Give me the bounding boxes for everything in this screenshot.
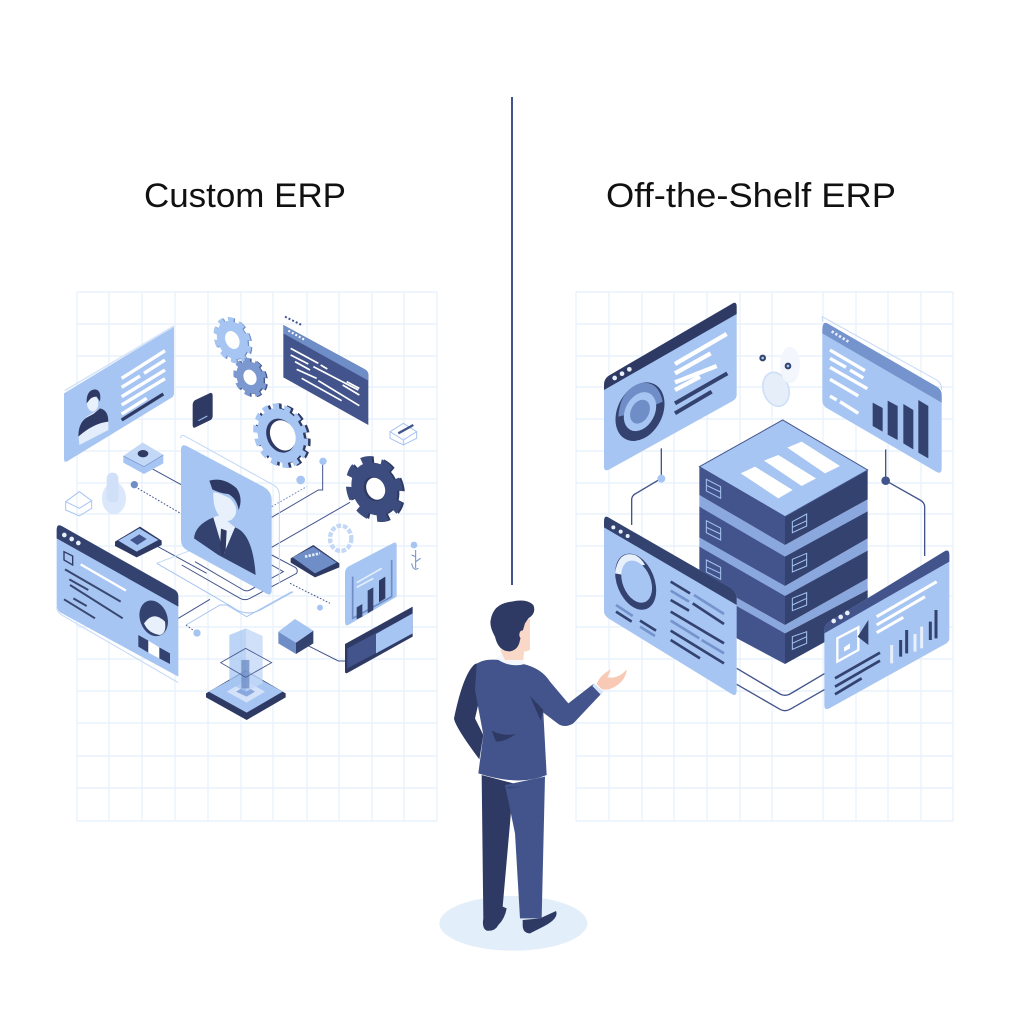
shoe bbox=[523, 911, 557, 933]
icon: gear 2 bbox=[230, 355, 272, 400]
heading: Custom ERP: Custom ERP bbox=[144, 177, 346, 215]
icon: hologram pedestal bbox=[206, 628, 286, 720]
server stack bbox=[699, 420, 868, 664]
icon: small tablet bbox=[193, 393, 213, 428]
jacket folds bbox=[492, 696, 543, 788]
face bbox=[515, 618, 530, 652]
back arm bbox=[454, 662, 483, 759]
icon: gear 3 bbox=[247, 398, 317, 474]
icon: faint puzzle ring bbox=[330, 526, 351, 551]
heading: Off-the-Shelf ERP: Off-the-Shelf ERP bbox=[606, 177, 896, 215]
floor shadow bbox=[439, 896, 587, 951]
open hand bbox=[597, 669, 627, 690]
icon: gear 1 bbox=[209, 313, 257, 367]
icon: cube bbox=[278, 619, 313, 654]
rings below monitor bbox=[157, 547, 200, 563]
panel: bar window bbox=[822, 317, 942, 473]
person figure bbox=[439, 601, 627, 951]
icon: chip right bbox=[291, 545, 339, 577]
hair bbox=[490, 601, 534, 651]
panel: central profile monitor bbox=[181, 435, 279, 594]
panel: profile card bbox=[64, 326, 174, 462]
server layer 4 bbox=[699, 577, 868, 664]
jacket bbox=[475, 660, 601, 780]
ear bbox=[519, 630, 525, 639]
faint ring icon bbox=[759, 347, 800, 410]
icon: outline box left bbox=[66, 492, 92, 516]
server layer 3 bbox=[699, 537, 868, 625]
node dots bbox=[657, 475, 665, 483]
divider line bbox=[511, 97, 513, 585]
neck bbox=[500, 640, 525, 660]
near leg bbox=[482, 775, 513, 931]
node dots bbox=[131, 458, 417, 637]
icon: gear 4 bbox=[340, 451, 411, 527]
illustration: off-the-shelf ERP bbox=[604, 303, 949, 711]
server layer 1 top bbox=[699, 420, 868, 545]
panel: dashboard window bbox=[57, 525, 178, 683]
panel: code window bbox=[283, 317, 368, 425]
collar bbox=[496, 653, 525, 665]
icon: isometric chip top bbox=[123, 443, 163, 474]
connector lines bbox=[632, 448, 925, 711]
grid: right panel background bbox=[576, 292, 953, 821]
cuff bbox=[592, 683, 603, 695]
icon: small vine bbox=[412, 550, 421, 569]
server layer 2 bbox=[699, 495, 868, 586]
icon: outline box right bbox=[390, 423, 417, 445]
grid: left panel background bbox=[77, 292, 437, 821]
panel: donut window bbox=[604, 303, 737, 470]
icon: faint marker bbox=[102, 473, 126, 514]
panel: analytics window bbox=[824, 551, 949, 709]
connector lines bbox=[135, 463, 350, 661]
illustration: custom ERP bbox=[57, 313, 421, 720]
panel: dark module bbox=[345, 607, 413, 673]
icon: chip left bbox=[115, 527, 162, 557]
panel: bar chart card bbox=[345, 542, 397, 625]
panel: data table window bbox=[604, 517, 737, 695]
far leg bbox=[505, 777, 545, 918]
node dot dark bbox=[881, 476, 890, 485]
